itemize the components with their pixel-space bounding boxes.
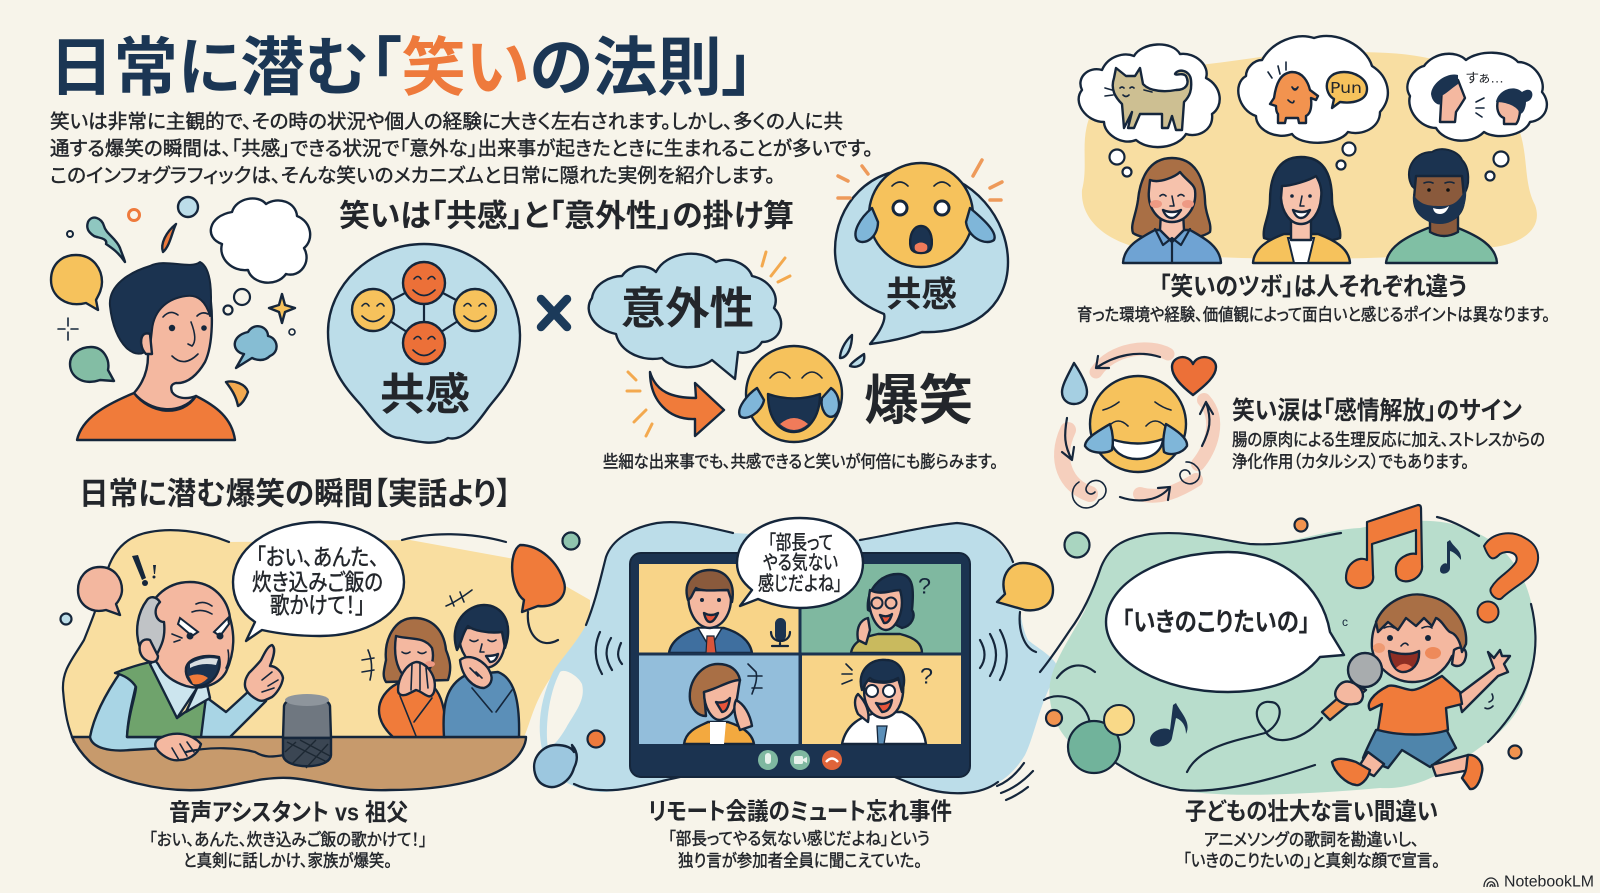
sound waves xyxy=(596,630,1033,800)
icon: tears of laughter cycle xyxy=(1062,349,1216,508)
caption: formula: 些細な出来事でも、共感できると笑いが何倍にも膨らみます。 xyxy=(603,452,998,472)
head xyxy=(1372,597,1463,682)
panel: empathy speech bubble with surprised face xyxy=(835,160,1008,344)
speech bubble: child xyxy=(1106,552,1344,692)
label: 共感 xyxy=(380,370,470,420)
ear xyxy=(141,333,152,354)
thought dots xyxy=(1110,142,1508,180)
heading: laughter formula: 笑いは「共感」と「意外性」の掛け算 xyxy=(339,198,794,234)
microphone xyxy=(1322,684,1366,720)
speech bubble: manager: やる気ない xyxy=(763,552,838,574)
video tile: surprised man: ? xyxy=(920,664,933,688)
tablet xyxy=(630,553,970,777)
icon: green bubble xyxy=(70,347,114,382)
panel: child singing scene: c xyxy=(1342,615,1348,629)
icon: big music notes xyxy=(1346,505,1422,588)
cream cut-out xyxy=(547,671,583,748)
call buttons xyxy=(758,750,842,770)
caption: tears of laughter: 浄化作用（カタルシス）でもあります。 xyxy=(1232,452,1469,472)
child xyxy=(1322,594,1510,789)
face xyxy=(134,286,212,409)
intro text: 通する爆笑の瞬間は、「共感」できる状況で「意外な」出来事が起きたときに生まれることが多いです。 xyxy=(50,138,873,160)
grandfather xyxy=(90,582,283,760)
icon: teal squiggle xyxy=(87,218,125,262)
intro text: このインフォグラフィックは、そんな笑いのメカニズムと日常に隠れた実例を紹介します。 xyxy=(50,165,775,187)
face: top xyxy=(403,262,445,304)
collar xyxy=(150,655,197,718)
speech bubble: grandfather: 「おい、あんた、 xyxy=(256,544,379,570)
green blob xyxy=(1049,521,1534,795)
label: big laugh: 爆笑 xyxy=(864,371,973,431)
right sleeve xyxy=(200,690,266,737)
hand on table xyxy=(155,734,201,760)
video tile: laughing woman xyxy=(639,655,800,744)
icon: dark note xyxy=(1150,703,1188,747)
caption: remote meeting xyxy=(668,830,930,870)
video tile: woman with glasses: ? xyxy=(918,574,931,598)
mouth xyxy=(1389,651,1419,672)
speech bubble: child: 「いきのこりたいの」 xyxy=(1122,607,1310,637)
mic cable xyxy=(1187,702,1322,772)
panel: remote meeting scene xyxy=(534,518,1058,800)
caption: voice assistant: 「おい、あんた、炊き込みご飯の歌かけて！」 xyxy=(149,830,427,850)
laughing woman xyxy=(362,618,450,737)
head xyxy=(146,582,233,687)
caption: tears of laughter xyxy=(1232,430,1545,472)
intro text xyxy=(50,111,873,187)
person: man beard xyxy=(1386,149,1497,263)
title: voice assistant: 音声アシスタント vs 祖父 xyxy=(169,800,408,826)
intro text: 笑いは非常に主観的で、その時の状況や個人の経験に大きく左右されます。しかし、多くの人に共 xyxy=(50,111,843,133)
caption: child: 「いきのこりたいの」と真剣な顔で宣言。 xyxy=(1183,852,1440,870)
shirt xyxy=(1369,676,1462,734)
caption: tears of laughter: 腸の原肉による生理反応に加え、ストレスからの xyxy=(1232,430,1545,450)
speaker cable xyxy=(186,748,285,757)
face: left xyxy=(352,289,394,331)
arm raised xyxy=(1458,650,1510,712)
icon: blue cloud bubble xyxy=(235,326,277,368)
caption: humor spots: 育った環境や経験、価値観によって面白いと感じるポイントは異なります。 xyxy=(1077,306,1550,324)
yellow blob xyxy=(63,530,590,790)
speech bubble: grandfather xyxy=(233,522,404,641)
decorative circles xyxy=(1064,532,1090,558)
panel: surprise cloud: 意外性 xyxy=(621,284,754,334)
icon: yellow bubble xyxy=(51,255,102,310)
caption: voice assistant xyxy=(149,830,427,870)
thought cloud: cat xyxy=(1079,44,1220,147)
caption: child: アニメソングの歌詞を勘違いし、 xyxy=(1204,830,1419,850)
eyes and cheeks xyxy=(1387,635,1393,641)
caption: remote meeting: 「部長ってやる気ない感じだよね」という xyxy=(668,830,930,848)
title: 日常に潜む「笑いの法則」 xyxy=(49,32,754,104)
yellow blob xyxy=(1082,51,1537,259)
legs and shoes xyxy=(1358,752,1384,776)
hair xyxy=(1376,594,1466,652)
video tile: surprised man xyxy=(802,655,961,744)
caption: voice assistant: と真剣に話しかけ、家族が爆笑。 xyxy=(183,852,392,870)
face: bottom xyxy=(403,322,445,364)
heading: humor spots: 「笑いのツボ」は人それぞれ違う xyxy=(1159,273,1467,301)
icon: small note xyxy=(1440,540,1461,574)
speech bubble: manager xyxy=(737,518,863,608)
face: right xyxy=(454,289,496,331)
icon: white thought cloud xyxy=(211,198,310,283)
panel: empathy speech bubble with surprised face: 共感 xyxy=(886,276,957,314)
shirt xyxy=(77,393,235,440)
vest xyxy=(115,662,206,737)
logo: NotebookLM: NotebookLM xyxy=(1504,874,1594,890)
mouth xyxy=(186,656,220,686)
hair xyxy=(110,262,211,354)
video tile: woman with glasses xyxy=(800,564,961,653)
caption: remote meeting: 独り言が参加者全員に聞こえていた。 xyxy=(678,852,922,870)
speech bubble: grandfather: 歌かけて！」 xyxy=(270,592,365,618)
icon: laughing face with tears xyxy=(739,335,864,442)
table xyxy=(72,737,526,790)
speech bubble: manager: 感じだよね」 xyxy=(758,573,842,595)
person: woman brown hair xyxy=(1123,158,1221,263)
thought cloud: pun: Pun xyxy=(1330,79,1362,97)
multiply sign xyxy=(541,299,567,327)
pointing hand xyxy=(245,645,283,701)
title: remote meeting: リモート会議のミュート忘れ事件 xyxy=(648,798,952,826)
icon: orange bubble xyxy=(512,545,565,612)
icon: pink bubble xyxy=(78,567,122,615)
thought cloud: conversation xyxy=(1407,53,1547,141)
icon: smart speaker xyxy=(283,694,331,768)
person: woman dark hair xyxy=(1253,157,1350,263)
gray hair xyxy=(137,597,164,660)
video tile: man with tie xyxy=(639,564,800,653)
thought cloud: conversation: すぁ… xyxy=(1466,70,1504,86)
heading: daily moments: 日常に潜む爆笑の瞬間【実話より】 xyxy=(79,476,511,512)
panel: voice assistant scene xyxy=(60,522,590,790)
speech bubble: grandfather: 炊き込みご飯の xyxy=(252,569,383,595)
hand xyxy=(1335,682,1363,704)
title: child: 子どもの壮大な言い間違い xyxy=(1185,798,1438,826)
panel: surprise cloud xyxy=(589,252,790,379)
arrow: orange curved xyxy=(627,372,724,436)
blue blob xyxy=(540,522,1058,793)
icon: exclamation marks xyxy=(132,555,156,586)
caption: child xyxy=(1183,830,1440,870)
heading: tears of laughter: 笑い涙は「感情解放」のサイン xyxy=(1232,397,1522,425)
icon: question mark xyxy=(1478,533,1538,622)
eyebrows xyxy=(178,618,229,636)
panel: child singing scene xyxy=(1040,505,1538,795)
left sleeve xyxy=(90,670,166,750)
illustration: thinking man xyxy=(51,197,310,440)
panel: empathy bubble xyxy=(328,244,520,443)
thought cloud: pun xyxy=(1238,36,1388,143)
speech bubble: manager: 「部長って xyxy=(768,532,833,554)
shorts xyxy=(1363,725,1456,768)
icon: blue bubble xyxy=(534,745,577,787)
panel: different humor people xyxy=(1079,36,1547,263)
laughing man xyxy=(444,590,519,737)
